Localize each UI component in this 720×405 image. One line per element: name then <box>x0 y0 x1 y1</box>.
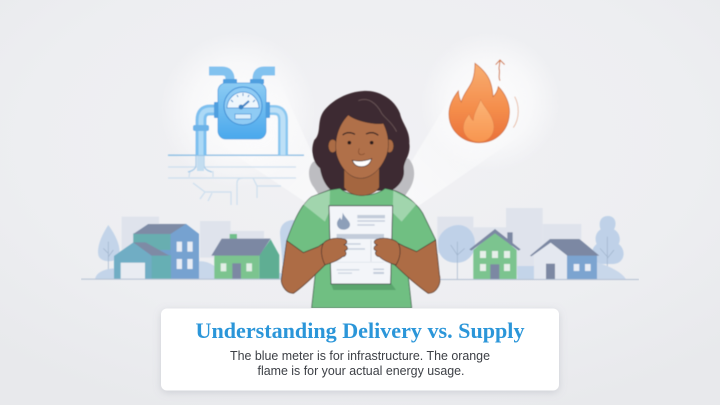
eyes and brows <box>343 133 378 155</box>
card body text: flame is for your actual energy usage. <box>258 364 464 378</box>
top left pipe <box>209 71 230 82</box>
shoulder light overlay <box>303 191 417 222</box>
person holding bill <box>281 91 440 308</box>
ground line left <box>81 278 284 281</box>
card body text: The blue meter is for infrastructure. The orange <box>230 349 490 363</box>
left hand <box>322 238 347 265</box>
neighborhood left <box>81 217 300 280</box>
flame icon on bill <box>337 213 350 230</box>
connectors <box>214 79 270 118</box>
face <box>336 115 388 178</box>
hair <box>312 91 410 191</box>
top right pipe <box>257 71 275 82</box>
left arm <box>281 240 345 293</box>
bill document <box>329 206 393 284</box>
card title: Understanding Delivery vs. Supply <box>196 318 524 343</box>
illustration group <box>81 32 639 308</box>
inner flame <box>463 99 494 142</box>
house: white and blue <box>530 239 599 279</box>
right arm <box>374 240 440 293</box>
icon: orange flame with rising arrow <box>449 60 518 143</box>
house: green gabled <box>469 229 521 279</box>
ground line right <box>440 278 639 281</box>
ears <box>328 139 337 153</box>
neck <box>344 168 379 196</box>
shirt <box>287 188 436 308</box>
rising arrow <box>496 60 505 81</box>
gauge <box>224 87 262 125</box>
pipe collar <box>193 125 209 131</box>
neighborhood right <box>437 208 639 280</box>
house: green with chimney <box>211 234 279 279</box>
skyline right <box>437 208 581 275</box>
icon: blue gas meter with pipes <box>168 71 304 205</box>
left riser pipe <box>201 110 218 155</box>
tree: round left <box>438 225 475 279</box>
card body text <box>230 349 490 378</box>
meter body <box>218 83 266 139</box>
house: teal and blue two-storey <box>114 224 199 279</box>
trees left <box>95 220 300 279</box>
caption card <box>161 308 559 390</box>
right hand <box>374 238 400 265</box>
right riser pipe <box>266 110 283 155</box>
smile <box>352 159 372 167</box>
tree: tall right <box>517 216 626 279</box>
underground pipes and cracks <box>168 155 296 205</box>
outer flame <box>449 63 509 143</box>
ground line <box>168 154 304 156</box>
skyline left <box>122 217 264 258</box>
light glow and beam: flame <box>393 32 560 207</box>
bill text lines <box>337 215 385 274</box>
shirt shadow <box>331 284 396 290</box>
heat arc <box>513 97 518 128</box>
hair shadow <box>309 158 414 198</box>
light glow and beam: meter <box>160 32 333 216</box>
